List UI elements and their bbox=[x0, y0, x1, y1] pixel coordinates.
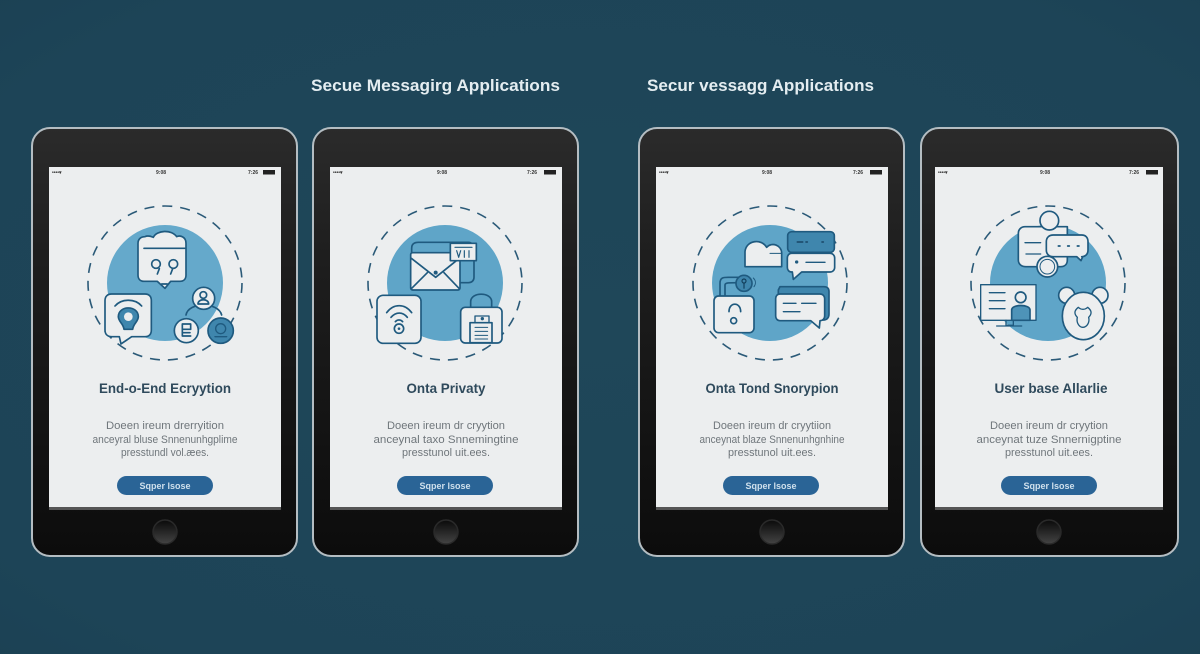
status bar bbox=[659, 170, 882, 176]
phone body bbox=[639, 128, 904, 556]
status bar: 7:26 bbox=[248, 170, 258, 176]
icon: encryption group bbox=[105, 231, 233, 344]
icon: dashed ring and blue disc bbox=[88, 206, 242, 360]
icon: data and encryption group bbox=[714, 232, 835, 333]
description: anceynat blaze Snnenunhgnhine bbox=[700, 434, 844, 446]
title: Onta Tond Snorypion bbox=[706, 380, 838, 396]
status bar: 7:26 bbox=[527, 170, 537, 176]
status bar bbox=[333, 170, 556, 176]
phone body bbox=[32, 128, 297, 556]
description: presstunol uit.ees. bbox=[402, 447, 490, 459]
description: anceynal taxo Snnemingtine bbox=[374, 434, 518, 446]
button bbox=[723, 476, 819, 495]
button: Sqper lsose bbox=[139, 481, 191, 491]
button: Sqper lsose bbox=[419, 481, 471, 491]
description: presstunol uit.ees. bbox=[1005, 447, 1093, 459]
description: presstundl vol.æes. bbox=[121, 447, 209, 459]
heading: left: Secue Messagirg Applications bbox=[311, 77, 560, 95]
status bar: ••••▾ bbox=[938, 170, 948, 176]
screen bbox=[330, 167, 562, 509]
description: anceynat tuze Snnernigptine bbox=[976, 434, 1122, 446]
screen bbox=[935, 167, 1163, 509]
button: Sqper lsose bbox=[745, 481, 797, 491]
status bar: ••••▾ bbox=[659, 170, 669, 176]
phone body bbox=[921, 128, 1178, 556]
button bbox=[117, 476, 213, 495]
panel: phone 3 Data and Encryption bbox=[639, 128, 904, 556]
description: Doeen ireum dr cryytiion bbox=[713, 420, 831, 432]
phone body bbox=[313, 128, 578, 556]
description: Doeen ireum dr cryytion bbox=[990, 420, 1108, 432]
title: Onta Privaty bbox=[406, 380, 486, 396]
description bbox=[700, 420, 844, 459]
status bar: ••••▾ bbox=[333, 170, 343, 176]
title: User base Allarlie bbox=[994, 380, 1108, 396]
panel: phone 1 End-to-End Encryption bbox=[32, 128, 297, 556]
home button bbox=[153, 520, 177, 544]
status bar: 9:08 bbox=[437, 170, 447, 176]
button bbox=[1001, 476, 1097, 495]
button bbox=[397, 476, 493, 495]
description: presstunol uit.ees. bbox=[728, 447, 816, 459]
description: anceyral bluse Snnenunhgplime bbox=[92, 434, 238, 446]
status bar bbox=[52, 170, 275, 176]
icon: dashed ring and blue disc bbox=[368, 206, 522, 360]
status bar: 9:08 bbox=[156, 170, 166, 176]
icon: dashed ring and blue disc bbox=[693, 206, 847, 360]
screen bbox=[656, 167, 888, 509]
description bbox=[374, 420, 518, 459]
title: End-o-End Ecryytion bbox=[99, 380, 231, 396]
panel: phone 4 User base Alliance bbox=[921, 128, 1178, 556]
home button bbox=[760, 520, 784, 544]
description: Doeen ireum drerryition bbox=[106, 420, 224, 432]
icon: privacy group bbox=[377, 242, 502, 343]
status bar bbox=[938, 170, 1158, 176]
description bbox=[976, 420, 1122, 459]
status bar: 9:08 bbox=[1040, 170, 1050, 176]
status bar: 7:26 bbox=[853, 170, 863, 176]
heading: right: Secur vessagg Applications bbox=[647, 77, 874, 95]
status bar: 9:08 bbox=[762, 170, 772, 176]
description bbox=[92, 420, 238, 459]
icon: dashed ring and blue disc bbox=[971, 206, 1125, 360]
home button bbox=[434, 520, 458, 544]
status bar: 7:26 bbox=[1129, 170, 1139, 176]
home button bbox=[1037, 520, 1061, 544]
screen bbox=[49, 167, 281, 509]
panel: phone 2 Data Privacy bbox=[313, 128, 578, 556]
button: Sqper lsose bbox=[1023, 481, 1075, 491]
status bar: ••••▾ bbox=[52, 170, 62, 176]
icon: users group bbox=[981, 211, 1108, 340]
description: Doeen ireum dr cryytion bbox=[387, 420, 505, 432]
